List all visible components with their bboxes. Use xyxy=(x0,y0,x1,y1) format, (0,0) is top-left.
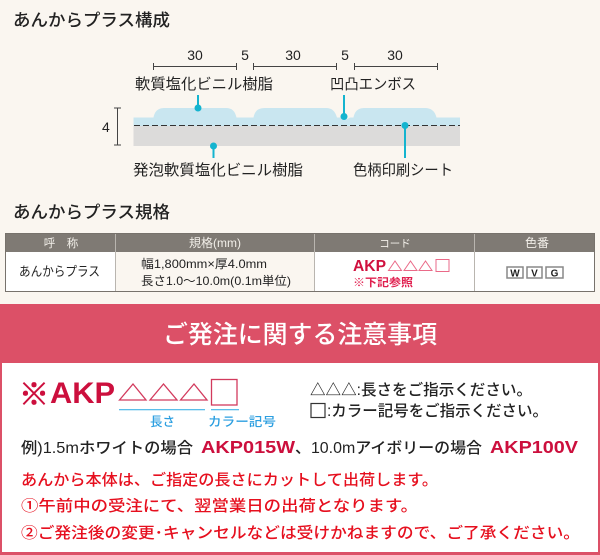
layer: blue top layer xyxy=(134,108,460,126)
dimension numbers: 30 xyxy=(285,47,301,63)
code note: ※下記参照 xyxy=(353,275,413,289)
label: foam PVC: 発泡軟質塩化ビニル樹脂 xyxy=(133,161,303,179)
example line: 、10.0mアイボリーの場合 xyxy=(295,439,483,457)
code diagram: ※ xyxy=(19,379,49,412)
label: colour code: カラー記号 xyxy=(208,415,276,429)
cross-section diagram xyxy=(102,47,460,179)
example line: 例)1.5mホワイトの場合 xyxy=(21,439,194,457)
code diagram: AKP xyxy=(50,377,115,410)
colour chips: W xyxy=(510,268,520,280)
example line xyxy=(21,437,578,457)
layer: grey foam layer xyxy=(134,126,460,146)
code diagram xyxy=(19,377,237,412)
product code xyxy=(353,258,449,275)
header labels xyxy=(44,235,549,250)
colour underline xyxy=(211,409,239,410)
header labels: 規格(mm) xyxy=(189,235,241,250)
dimension numbers: 5 xyxy=(341,47,349,63)
red note 2: ①午前中の受注にて、翌営業日の出荷となります。 xyxy=(21,496,418,515)
leader: emboss xyxy=(340,95,348,120)
leader: soft PVC xyxy=(194,95,202,112)
specification table xyxy=(6,234,594,292)
dimension numbers: 5 xyxy=(241,47,249,63)
leader: print sheet xyxy=(402,122,408,158)
colour chips: G xyxy=(551,268,559,280)
dimension lines xyxy=(154,63,438,70)
example line: AKP015W xyxy=(201,437,296,457)
length underline xyxy=(119,409,205,410)
label: length: 長さ xyxy=(150,415,175,429)
label: print sheet: 色柄印刷シート xyxy=(353,162,453,179)
dimension numbers: 30 xyxy=(187,47,203,63)
notice panel xyxy=(0,304,600,555)
colour chips xyxy=(507,267,563,280)
table header xyxy=(6,234,594,252)
instruction: length: △△△:長さをご指示ください。 xyxy=(310,381,532,399)
table background xyxy=(6,234,594,292)
notice frame xyxy=(0,304,600,555)
header labels: コード xyxy=(379,238,411,250)
product code: AKP xyxy=(353,258,386,275)
leader: foam xyxy=(210,142,217,158)
instruction: colour: :カラー記号をご指示ください。 xyxy=(327,402,548,420)
notice heading: ご発注に関する注意事項 xyxy=(163,321,437,349)
thickness bracket xyxy=(114,108,121,145)
heading: composition: あんからプラス構成 xyxy=(13,11,170,30)
red note 1: あんから本体は、ご指定の長さにカットして出荷します。 xyxy=(21,471,438,489)
size length: 長さ1.0〜10.0m(0.1m単位) xyxy=(141,274,291,288)
thickness number: 4 xyxy=(102,119,110,135)
size width: 幅1,800mm×厚4.0mm xyxy=(141,256,267,271)
dimension numbers: 30 xyxy=(387,47,403,63)
notice body xyxy=(2,363,598,552)
red note 3: ②ご発注後の変更･キャンセルなどは受けかねますので、ご了承ください。 xyxy=(21,523,580,542)
table spec cell xyxy=(116,252,314,291)
example line: AKP100V xyxy=(490,437,578,457)
product name: あんからプラス xyxy=(19,264,100,279)
colour chips: V xyxy=(531,268,538,280)
heading: specification: あんからプラス規格 xyxy=(13,203,170,222)
header labels: 呼 称 xyxy=(44,237,79,250)
dimension numbers xyxy=(187,47,403,63)
header labels: 色番 xyxy=(525,236,549,250)
label: emboss: 凹凸エンボス xyxy=(330,76,416,93)
print sheet dashed line xyxy=(134,124,460,126)
label: soft PVC: 軟質塩化ビニル樹脂 xyxy=(135,75,273,93)
